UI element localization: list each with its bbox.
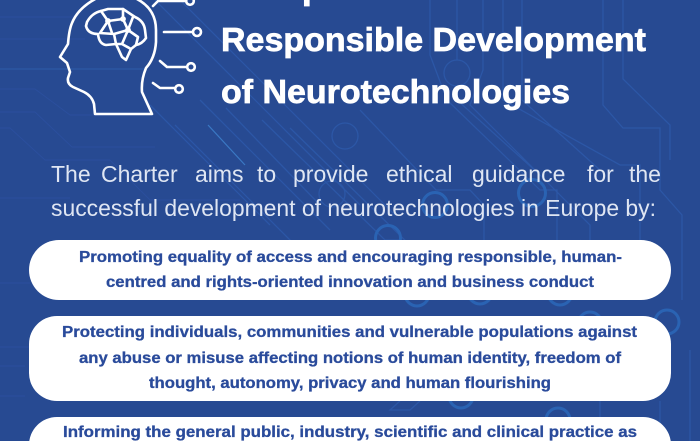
connector 4: [153, 83, 174, 88]
intro text: to: [257, 161, 276, 187]
intro text: Charter: [101, 161, 178, 187]
intro text: the: [629, 161, 661, 187]
panel: protecting individuals: [29, 316, 671, 401]
head outline: [60, 0, 156, 114]
panel: promoting equality: [29, 240, 671, 300]
icon: head with brain and circuit connectors: [60, 0, 201, 114]
intro text: ethical: [386, 161, 452, 187]
panel: informing the public: [29, 417, 671, 441]
panel: promoting equality: Promoting equality of access and encouraging responsible, human-: [79, 249, 622, 266]
connector 1: [153, 1, 185, 6]
intro text: guidance: [472, 161, 565, 187]
brain: [86, 9, 146, 60]
title: [221, 0, 646, 110]
panel: protecting individuals: any abuse or misuse affecting notions of human identity, freedom of: [79, 350, 622, 367]
circuit traces: diagonals and verticals: [150, 0, 690, 441]
panel: promoting equality: centred and rights-oriented innovation and business conduct: [106, 274, 595, 291]
panel: protecting individuals: Protecting individuals, communities and vulnerable populations against: [62, 324, 638, 341]
intro text: aims: [195, 161, 244, 187]
intro text: The: [51, 161, 91, 187]
intro text: [51, 161, 661, 221]
title: Responsible Development: [221, 21, 646, 58]
panel: informing the public: Informing the general public, industry, scientific and clinical practice as: [63, 424, 637, 441]
title: of Neurotechnologies: [221, 73, 570, 110]
connector 2: [164, 31, 192, 33]
connector 3: [160, 61, 187, 67]
intro text: provide: [293, 161, 368, 187]
panel: protecting individuals: thought, autonomy, privacy and human flourishing: [149, 375, 551, 392]
intro text: for: [587, 161, 614, 187]
circuit traces: left side: [0, 17, 240, 396]
intro text: successful development of neurotechnologies in Europe by:: [51, 195, 656, 221]
bright circuit nodes: [0, 69, 679, 432]
